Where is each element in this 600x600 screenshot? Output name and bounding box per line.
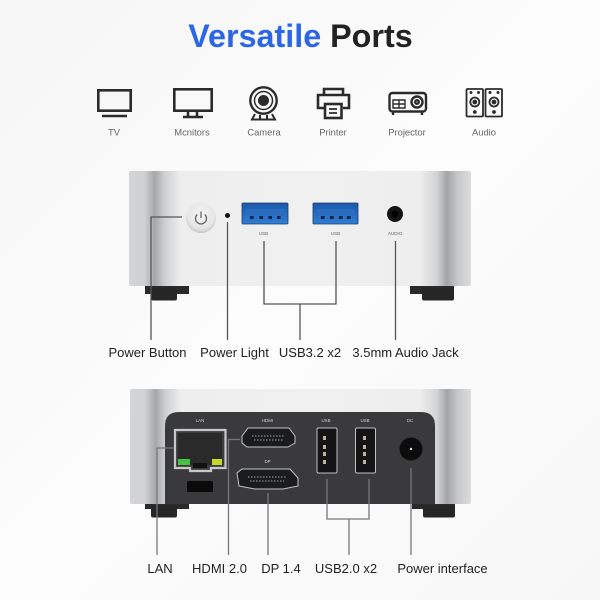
front port labels <box>108 345 459 360</box>
back port captions: LAN <box>196 418 204 423</box>
back port captions: DP <box>264 459 271 464</box>
back port captions: USB <box>321 418 331 423</box>
label: TV: TV <box>108 126 121 138</box>
icon: printer <box>318 89 349 118</box>
label: camera: Camera <box>247 126 281 138</box>
label: monitors: Mcnitors <box>174 126 210 138</box>
back body <box>130 389 471 504</box>
icon: monitor <box>174 89 212 117</box>
label: power button: Power Button <box>108 345 187 360</box>
back feet <box>145 504 455 518</box>
USB 3.2 port 1 <box>242 203 288 224</box>
label: power interface: Power interface <box>397 561 488 576</box>
icon: audio speakers <box>466 89 502 116</box>
label: printer: Printer <box>319 126 347 138</box>
icon: projector <box>390 93 426 115</box>
back port captions: USB <box>360 418 370 423</box>
LAN port <box>175 430 226 471</box>
panel: back of mini PC <box>130 389 471 518</box>
panel: front of mini PC <box>129 171 471 300</box>
icon row: device types <box>98 87 502 138</box>
label: HDMI: HDMI 2.0 <box>192 561 247 576</box>
callout lines: back <box>157 440 411 555</box>
audio caption: AUDIO <box>388 231 403 236</box>
back port captions: HDMI <box>262 418 273 423</box>
label: LAN: LAN <box>147 561 173 576</box>
front feet <box>145 286 454 300</box>
back port captions <box>196 418 413 464</box>
USB 2.0 port 2 <box>356 428 376 473</box>
HDMI port <box>242 428 295 447</box>
label: DP: DP 1.4 <box>261 561 301 576</box>
back dark panel <box>165 412 435 504</box>
label: USB 2.0: USB2.0 x2 <box>315 561 377 576</box>
USB caption 1: USB <box>259 231 268 236</box>
audio jack <box>387 206 403 222</box>
title: Versatile Ports <box>188 18 413 54</box>
label: audio: Audio <box>472 126 496 138</box>
DP port <box>237 469 298 489</box>
power light <box>225 213 230 218</box>
label: projector: Projector <box>388 126 426 138</box>
label: audio jack: 3.5mm Audio Jack <box>352 345 459 360</box>
icon: camera <box>250 87 277 120</box>
power button <box>186 203 216 233</box>
USB caption 2: USB <box>331 231 340 236</box>
DC jack <box>400 438 422 460</box>
label: power light: Power Light <box>200 345 269 360</box>
back port captions: DC <box>407 418 413 423</box>
icon: TV <box>98 90 131 116</box>
label: USB 3.2: USB3.2 x2 <box>279 345 341 360</box>
back port labels <box>147 561 488 576</box>
lock slot <box>187 481 213 492</box>
USB 3.2 port 2 <box>313 203 358 224</box>
front body <box>129 171 471 286</box>
USB 2.0 port 1 <box>317 428 337 473</box>
callout lines: front <box>151 217 396 340</box>
